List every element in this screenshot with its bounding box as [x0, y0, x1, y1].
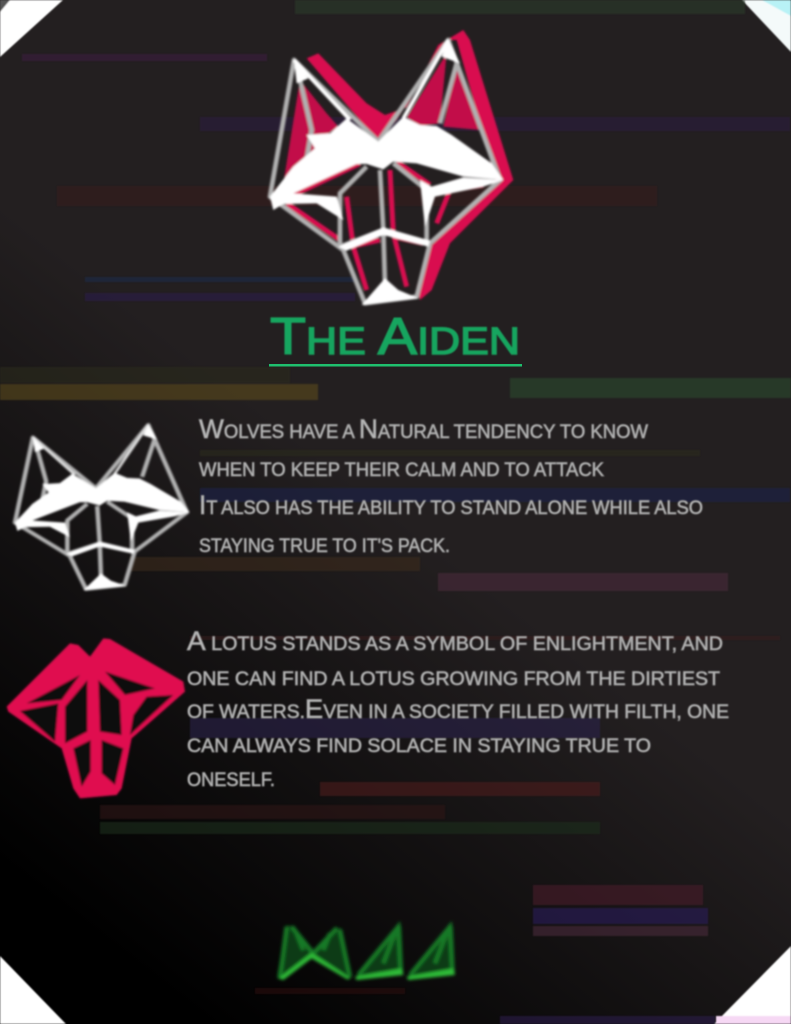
text block: lotus: CAN ALWAYS FIND SOLACE IN STAYING TRUE TO: [187, 736, 651, 757]
text block: lotus: OF WATERS.EVEN IN A SOCIETY FILLED WITH FILTH, ONE: [187, 694, 729, 724]
white ear edges: [294, 40, 448, 120]
text block: wolves: [199, 414, 703, 557]
green M shape: [277, 925, 352, 978]
icon: white wolf head: [15, 425, 189, 590]
text block: wolves: IT ALSO HAS THE ABILITY TO STAND ALONE WHILE ALSO: [199, 490, 703, 520]
text block: wolves: STAYING TRUE TO IT'S PACK.: [199, 536, 450, 557]
text block: lotus: [187, 626, 729, 791]
title: THE AIDEN: [270, 308, 520, 366]
wolf ear tips: [294, 39, 460, 83]
wolf right cheek highlight: [420, 177, 503, 227]
text block: lotus: A LOTUS STANDS AS A SYMBOL OF ENLIGHTMENT, AND: [187, 626, 723, 656]
icon: red wolf head: [7, 638, 185, 798]
green triangle one: [355, 925, 403, 978]
text block: wolves: WOLVES HAVE A NATURAL TENDENCY TO KNOW: [199, 414, 648, 444]
red offset wolf layer: [283, 30, 513, 300]
wolf jaw highlight: [338, 227, 430, 251]
text block: lotus: ONE CAN FIND A LOTUS GROWING FROM THE DIRTIEST: [187, 669, 720, 690]
text block: lotus: ONESELF.: [187, 770, 275, 791]
wolf chin: [362, 278, 418, 305]
icon: large wolf head logo: [270, 30, 513, 305]
text block: wolves: WHEN TO KEEP THEIR CALM AND TO ATTACK: [199, 460, 604, 481]
grey wolf outline: [270, 40, 500, 303]
icon: green logo mark: [277, 925, 455, 980]
green triangle two: [407, 925, 455, 978]
white wolf face mass: [270, 117, 503, 220]
wolf face cut-outs: [20, 672, 173, 787]
title underline: [269, 364, 522, 366]
